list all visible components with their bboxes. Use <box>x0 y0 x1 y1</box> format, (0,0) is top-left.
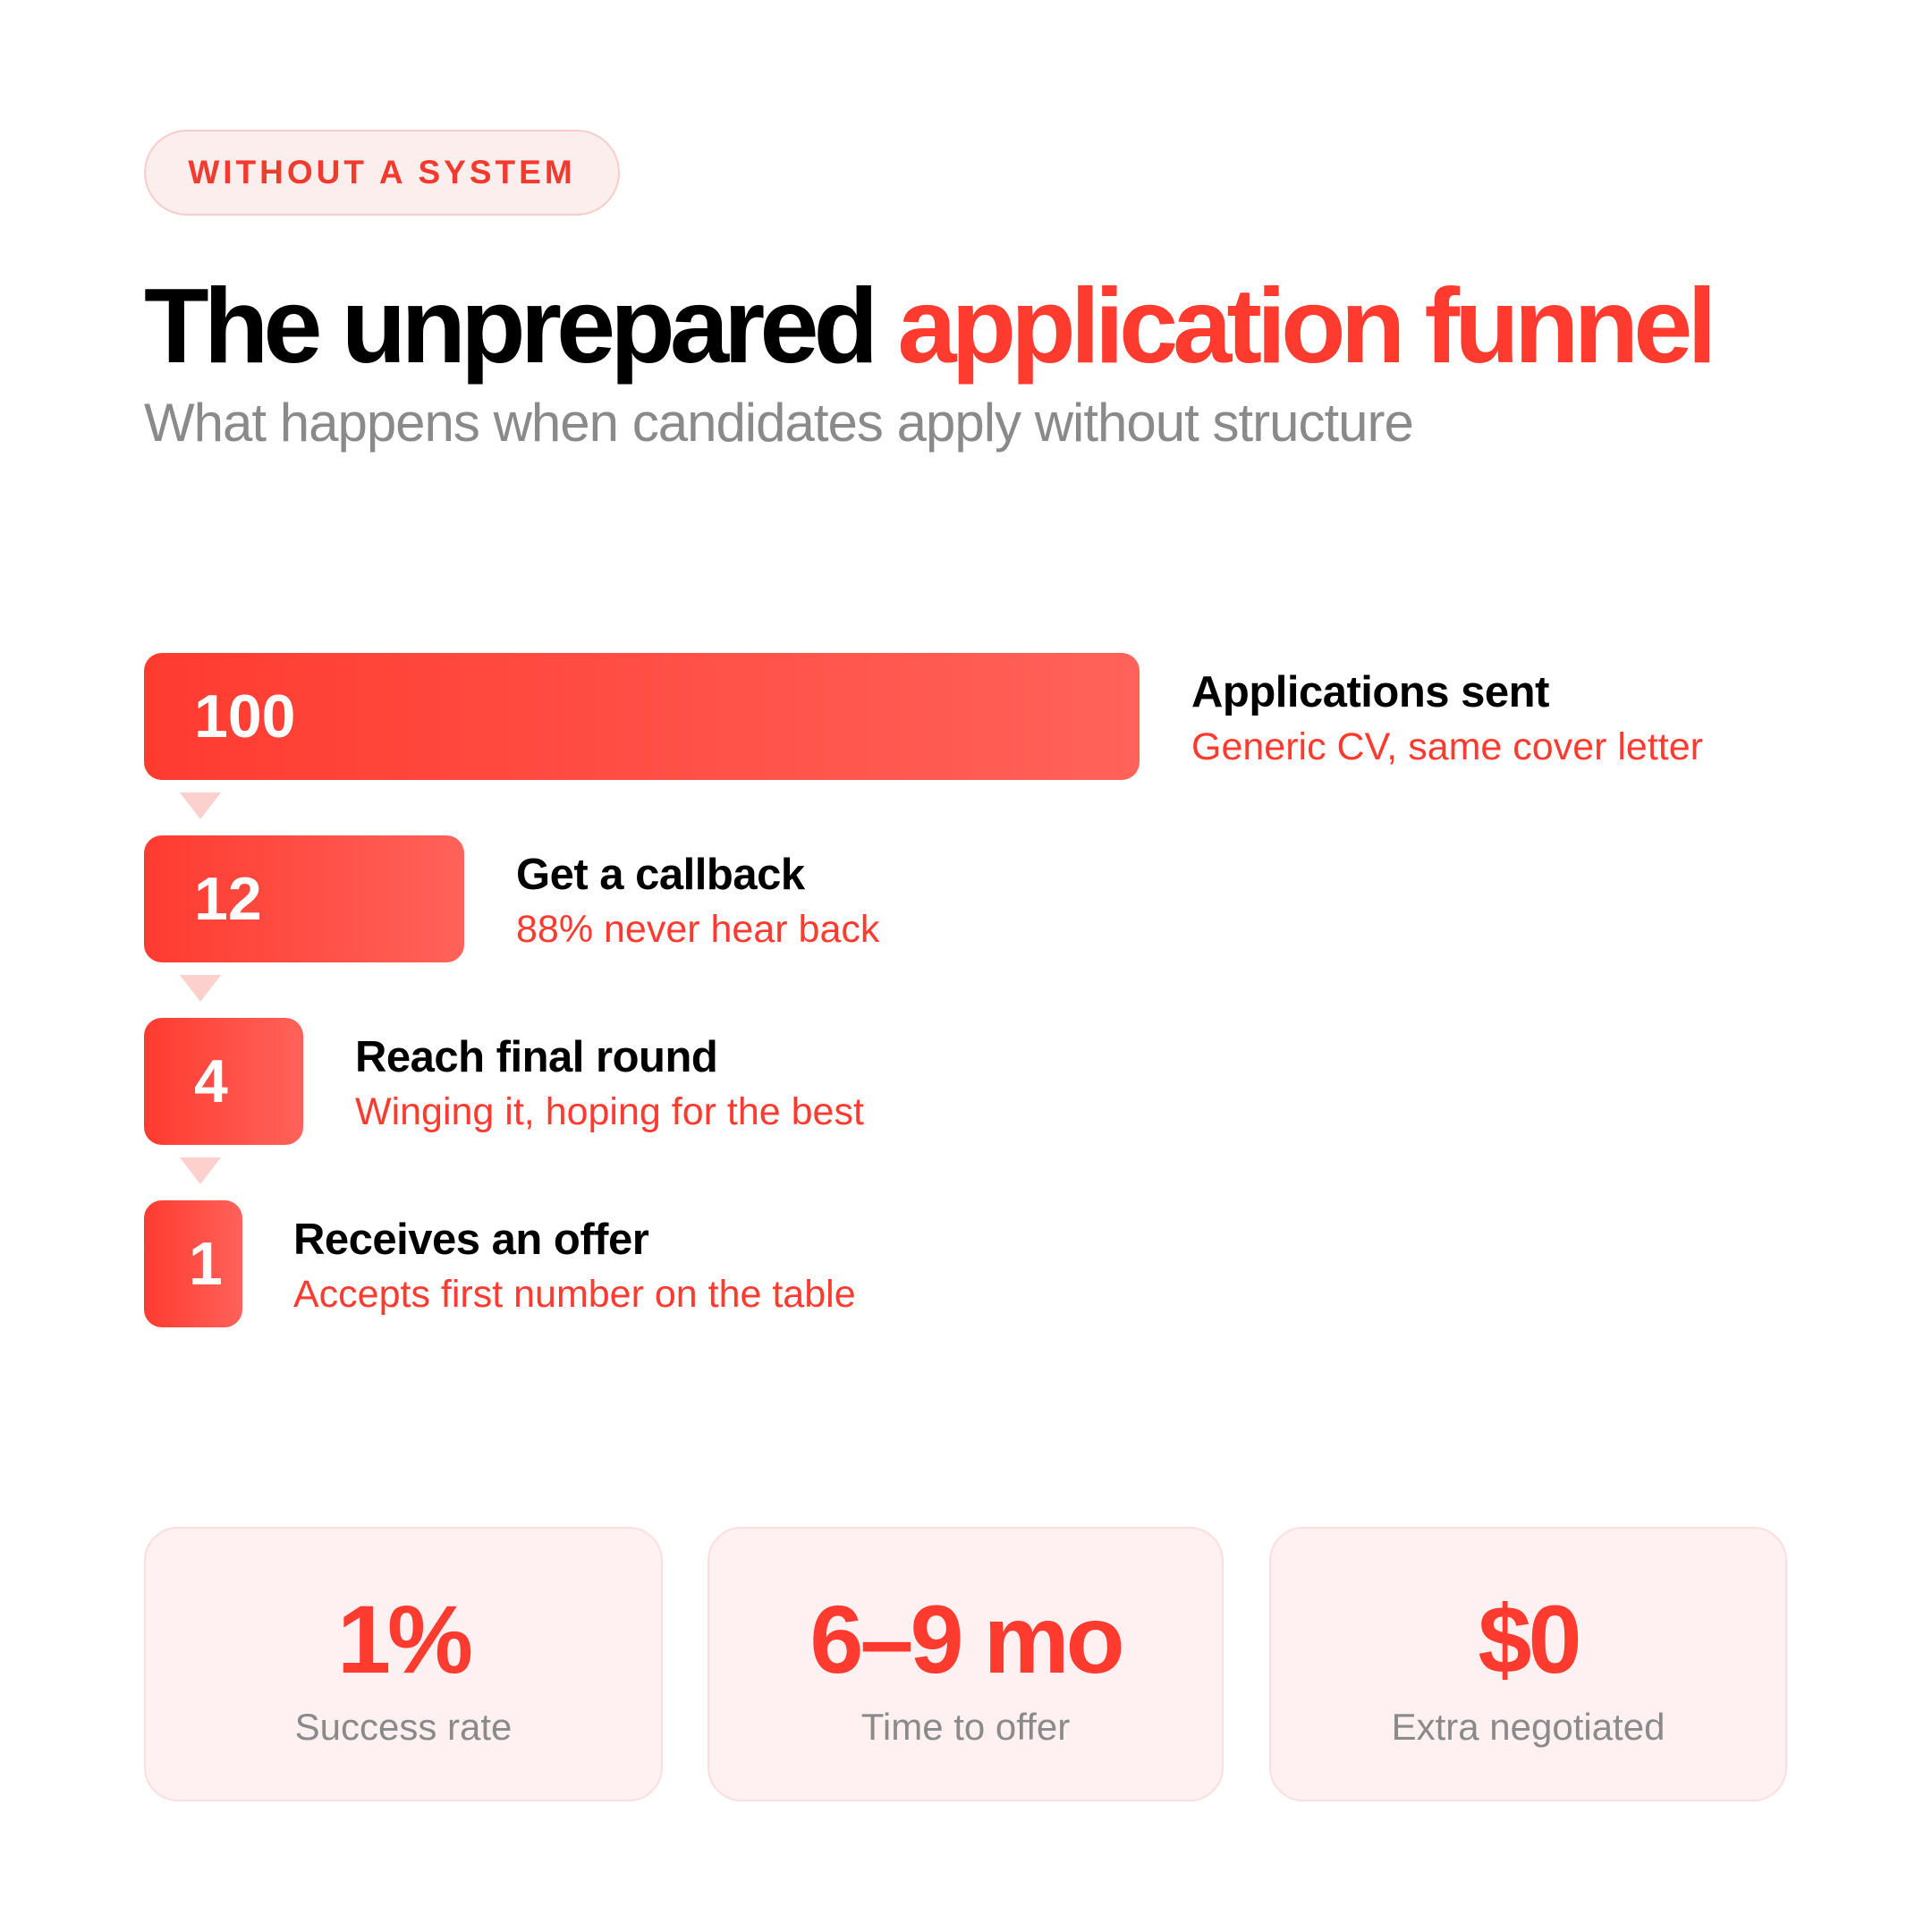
label: offer: Accepts first number on the table <box>293 1273 856 1316</box>
bar: 100: 100 <box>194 682 295 750</box>
arrow 2 <box>180 975 221 1002</box>
tag pill: WITHOUT A SYSTEM <box>188 154 576 191</box>
label: applications sent: Generic CV, same cover letter <box>1191 725 1703 768</box>
bar: 12: 12 <box>194 865 262 933</box>
bar: 1 <box>144 1200 242 1327</box>
label: callback: 88% never hear back <box>516 908 879 951</box>
label: callback <box>516 851 880 951</box>
label: applications sent <box>1191 668 1703 768</box>
title: The unprepared application funnel <box>144 267 1711 386</box>
bar: 1: 1 <box>189 1230 223 1298</box>
label: callback: Get a callback <box>516 851 805 899</box>
bar: 4 <box>144 1018 303 1145</box>
card: success rate <box>144 1527 663 1801</box>
label: offer: Receives an offer <box>293 1216 648 1264</box>
arrow 1 <box>180 792 221 819</box>
subtitle: What happens when candidates apply without structure <box>144 393 1413 453</box>
bar: 100 <box>144 653 1140 780</box>
bar: 12 <box>144 835 464 962</box>
bar: 4: 4 <box>194 1047 228 1115</box>
label: offer <box>293 1216 856 1316</box>
label: final round <box>355 1033 864 1133</box>
card: time to offer: Time to offer <box>861 1706 1070 1748</box>
card: extra negotiated <box>1269 1527 1787 1801</box>
card: extra negotiated: Extra negotiated <box>1392 1706 1665 1748</box>
card: extra negotiated: $0 <box>1478 1585 1579 1693</box>
tag pill <box>144 130 620 216</box>
label: final round: Winging it, hoping for the best <box>355 1090 864 1133</box>
arrow 3 <box>180 1157 221 1184</box>
card: time to offer <box>708 1527 1224 1801</box>
card: success rate: 1% <box>337 1585 470 1693</box>
label: applications sent: Applications sent <box>1191 668 1549 716</box>
card: success rate: Success rate <box>295 1706 512 1748</box>
label: final round: Reach final round <box>355 1033 717 1081</box>
card: time to offer: 6–9 mo <box>809 1585 1122 1693</box>
